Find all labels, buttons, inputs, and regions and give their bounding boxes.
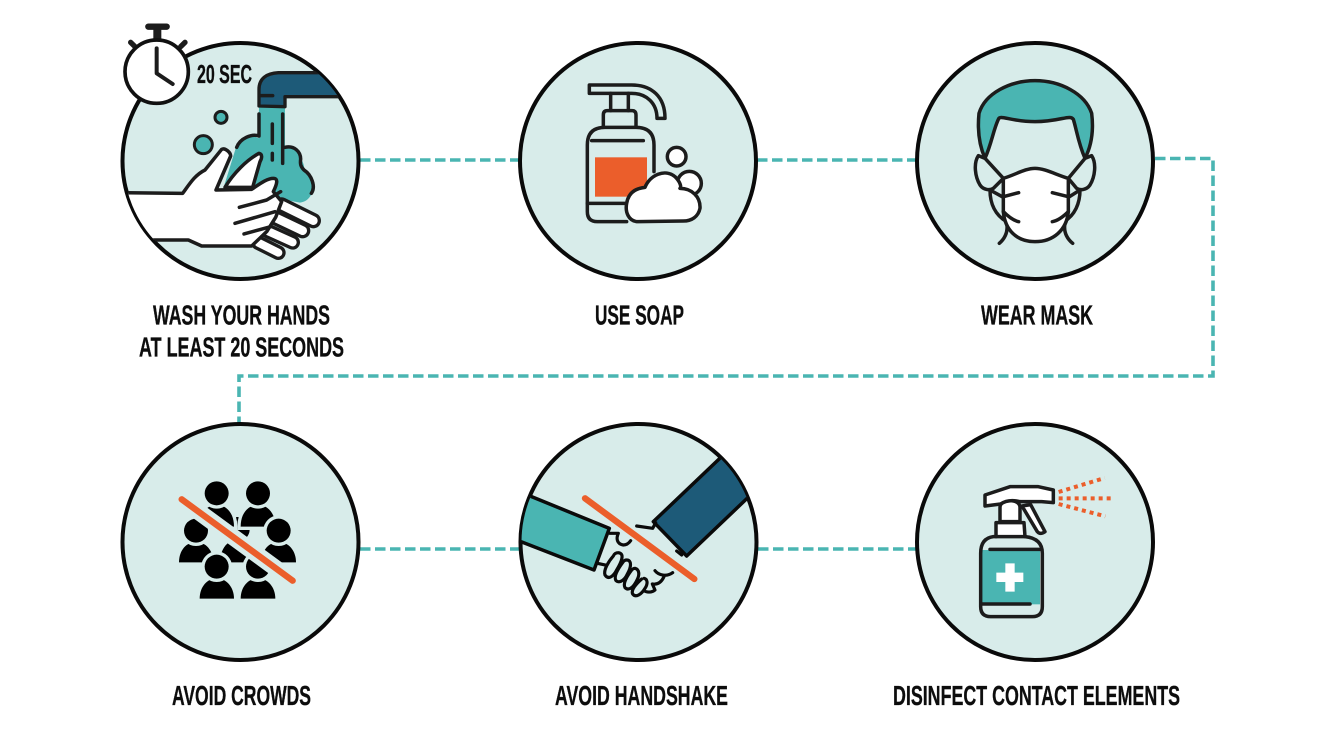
heading: use soap: USE SOAP xyxy=(595,300,684,330)
panel: avoid crowds xyxy=(122,424,358,660)
label: 20 sec: 20 SEC xyxy=(197,59,252,89)
panel: use soap xyxy=(520,43,756,279)
panel: wash your hands xyxy=(122,27,358,279)
icon: soap bottle xyxy=(587,85,701,222)
icon: crowd crossed out xyxy=(179,481,296,599)
icon: face with mask xyxy=(975,81,1095,243)
heading: wash your hands xyxy=(139,300,344,362)
panel: wear mask xyxy=(917,43,1153,279)
heading: wash your hands: WASH YOUR HANDS xyxy=(153,300,330,330)
connector: dashed flow path xyxy=(239,158,1213,549)
heading: avoid crowds: AVOID CROWDS xyxy=(172,680,311,711)
panel: disinfect contact elements xyxy=(917,424,1153,660)
icon: handshake crossed out xyxy=(517,455,752,596)
icon: faucet and foam xyxy=(123,73,343,253)
icon: spray bottle xyxy=(981,478,1114,617)
heading: wash your hands: AT LEAST 20 SECONDS xyxy=(139,332,344,362)
icon: stopwatch xyxy=(125,27,188,103)
panel: avoid handshake xyxy=(517,424,756,660)
icon: hands xyxy=(123,149,313,253)
heading: avoid handshake: AVOID HANDSHAKE xyxy=(555,680,728,711)
heading: wear mask: WEAR MASK xyxy=(981,300,1093,330)
